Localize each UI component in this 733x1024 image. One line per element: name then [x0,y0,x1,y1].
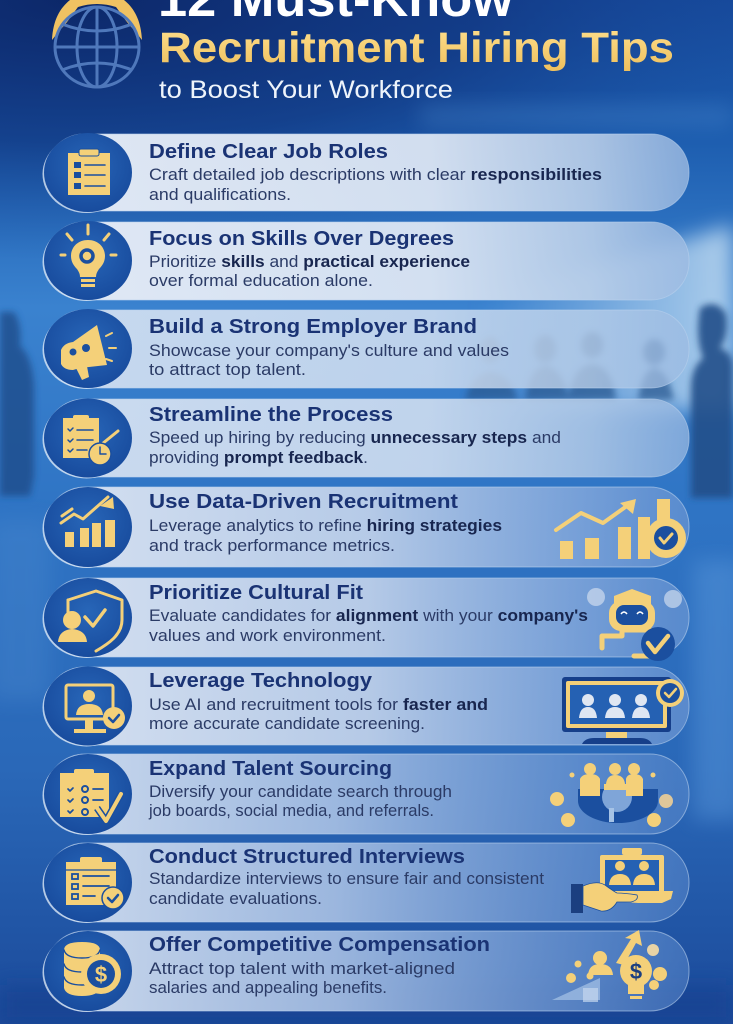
title: Recruitment Hiring Tips [159,24,674,72]
panel: tip 3 Build a Strong Employer Brand: Showcase your company's culture and values [149,342,509,360]
panel: tip 9 Conduct Structured Interviews [42,843,689,923]
panel: tip 1 Define Clear Job Roles: and qualifications. [149,186,291,204]
title [158,0,674,104]
panel: tip 3 Build a Strong Employer Brand: Build a Strong Employer Brand [149,315,477,338]
panel: tip 5 Use Data-Driven Recruitment: Leverage analytics to refine hiring strategies [149,517,502,535]
icon: robot recruiter with check [587,588,682,661]
panel: tip 6 Prioritize Cultural Fit: values and work environment. [149,627,386,645]
icon: megaphone [61,325,116,380]
panel: tip 8 Expand Talent Sourcing: Expand Talent Sourcing [149,757,392,780]
panel: tip 1 Define Clear Job Roles [42,133,689,213]
panel: tip 5 Use Data-Driven Recruitment: and track performance metrics. [149,537,395,555]
panel: tip 4 Streamline the Process: providing prompt feedback . [149,449,368,467]
panel: tip 8 Expand Talent Sourcing [42,754,689,835]
panel: tip 7 Leverage Technology: more accurate candidate screening. [149,715,425,733]
panel: tip 3 Build a Strong Employer Brand [42,309,689,389]
panel: tip 5 Use Data-Driven Recruitment: Use Data-Driven Recruitment [149,490,458,513]
icon: bar chart with arrow [61,497,115,547]
panel: tip 7 Leverage Technology: Leverage Technology [149,669,373,692]
panel: tip 4 Streamline the Process: Streamline the Process [149,403,393,426]
panel: tip 6 Prioritize Cultural Fit: Evaluate candidates for alignment with your company's [149,607,588,625]
panel: tip 10 Offer Competitive Compensation [42,930,689,1012]
panel: tip 2 Focus on Skills Over Degrees: Focus on Skills Over Degrees [149,227,454,250]
panel: tip 1 Define Clear Job Roles: Define Clear Job Roles [149,140,388,163]
panel: tip 6 Prioritize Cultural Fit: Prioritize Cultural Fit [149,581,363,604]
icon: survey checklist [60,769,121,821]
panel: tip 6 Prioritize Cultural Fit [42,578,689,661]
icon: clipboard with check badge [66,857,124,909]
panel: tip 2 Focus on Skills Over Degrees: Prioritize skills and practical experience [149,253,470,271]
panel: tip 7 Leverage Technology: Use AI and recruitment tools for faster and [149,696,488,714]
icon: light bulb with gear [61,225,116,287]
header icon: globe with gold bell [52,0,142,87]
panel: tip 9 Conduct Structured Interviews: Standardize interviews to ensure fair and consistent [149,870,544,888]
icon: analytics chart with check badge [556,499,686,559]
panel: tip 4 Streamline the Process [42,398,689,478]
icon: checklist with clock [63,415,118,465]
panel: tip 10 Offer Competitive Compensation: salaries and appealing benefits. [149,979,387,997]
panel: tip 3 Build a Strong Employer Brand: to attract top talent. [149,361,306,379]
icon: talent magnet with people [550,763,673,827]
icon: bulb with dollar, people and rising arrow [552,930,667,1002]
panel: tip 9 Conduct Structured Interviews: candidate evaluations. [149,890,322,908]
icon: shield with person [58,591,122,651]
icon: video call monitor with check [562,677,684,744]
panel: tip 10 Offer Competitive Compensation: Attract top talent with market-aligned [149,960,455,978]
panel: tip 4 Streamline the Process: Speed up hiring by reducing unnecessary steps and [149,429,561,447]
title: to Boost Your Workforce [159,76,453,104]
icon: coin stack with dollar [64,942,121,996]
panel: tip 2 Focus on Skills Over Degrees [42,221,689,301]
panel: tip 8 Expand Talent Sourcing: job boards, social media, and referrals. [148,802,434,820]
panel: tip 7 Leverage Technology [42,666,689,746]
panel: tip 5 Use Data-Driven Recruitment [42,487,689,568]
panel: tip 1 Define Clear Job Roles: Craft detailed job descriptions with clear responsibilities [149,166,602,184]
panel: tip 9 Conduct Structured Interviews: Conduct Structured Interviews [149,845,465,868]
icon: laptop call and handshake [571,848,673,913]
icon: monitor with person [66,685,125,733]
icon: coin stack with dollar: $ [95,962,107,987]
panel: tip 10 Offer Competitive Compensation: Offer Competitive Compensation [149,933,490,956]
icon: bulb with dollar, people and rising arrow: $ [630,959,642,984]
icon: clipboard checklist [68,149,110,195]
panel: tip 2 Focus on Skills Over Degrees: over formal education alone. [149,272,373,290]
panel: tip 8 Expand Talent Sourcing: Diversify your candidate search through [149,783,452,801]
